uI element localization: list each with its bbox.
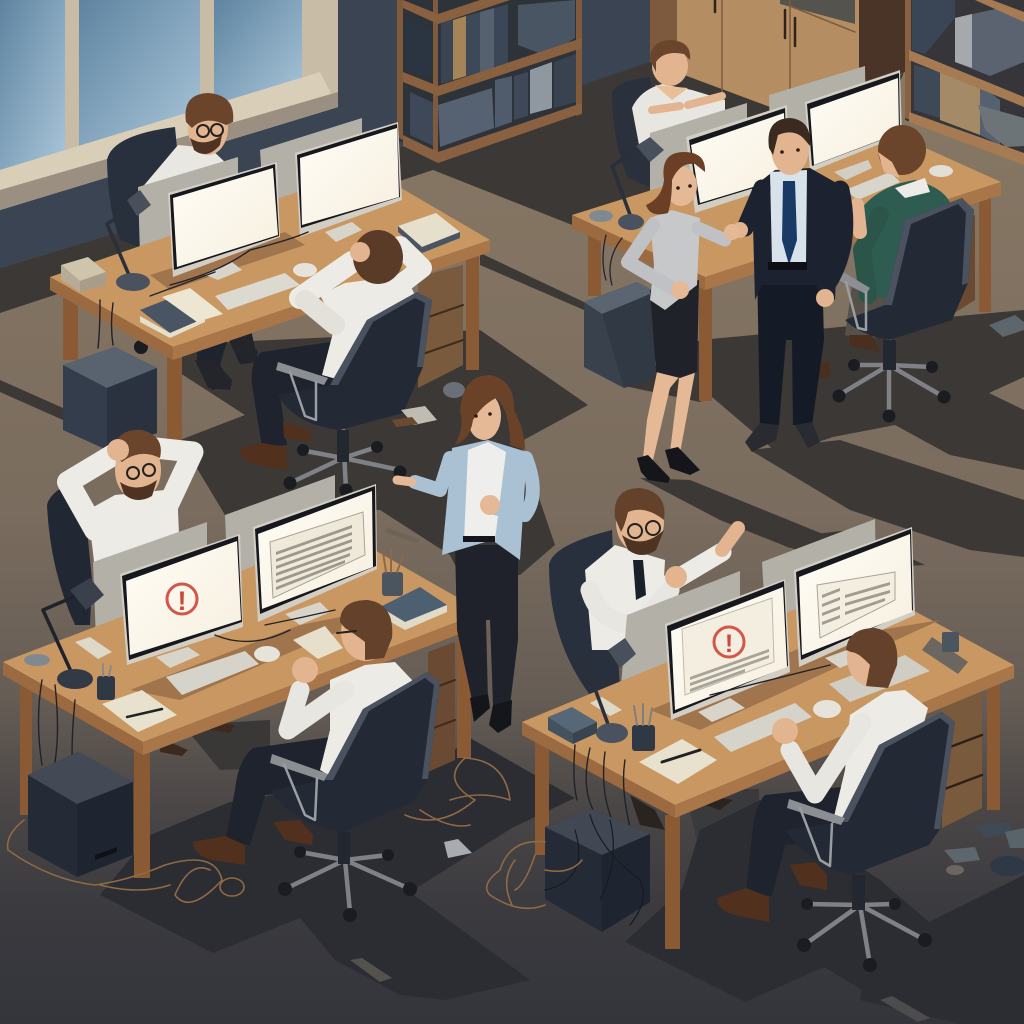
monitor: error alert: ! bbox=[178, 586, 186, 616]
monitor bbox=[295, 122, 402, 242]
monitor: error alert bbox=[120, 534, 243, 668]
chair back bbox=[785, 712, 955, 875]
shelf: back wall binders bbox=[397, 0, 582, 163]
desk lamp bbox=[612, 137, 664, 230]
workstation: top right bbox=[572, 40, 1001, 401]
computer tower bbox=[545, 809, 650, 932]
scattered papers bbox=[392, 315, 1024, 427]
cables bbox=[574, 665, 830, 835]
person: seated man front of bottom left desk bbox=[193, 600, 440, 922]
person: green sweater seated bbox=[814, 125, 974, 422]
workstation: bottom right bbox=[487, 488, 1014, 949]
chair back bbox=[278, 292, 432, 430]
monitor bbox=[686, 105, 789, 213]
floor cables bbox=[8, 758, 510, 902]
monitor bbox=[168, 162, 280, 280]
cables bbox=[603, 235, 622, 285]
stand pad bbox=[590, 697, 622, 716]
workstation: top left bbox=[50, 93, 490, 450]
coaster bbox=[589, 210, 613, 222]
item on floor bbox=[444, 839, 472, 858]
workstation: bottom left bbox=[3, 430, 510, 902]
tower cables bbox=[545, 815, 643, 925]
drawer unit bbox=[942, 692, 982, 828]
monitor bbox=[805, 70, 902, 180]
monitor: error alert bbox=[665, 579, 790, 722]
chair bbox=[832, 198, 974, 422]
pencil cup bbox=[97, 664, 115, 700]
desk top bbox=[3, 532, 483, 742]
keyboard bbox=[166, 651, 259, 695]
mouse bbox=[254, 646, 280, 662]
monitor: error alert: ! bbox=[725, 630, 733, 658]
scattered items bbox=[944, 822, 1024, 876]
stand pad bbox=[75, 637, 112, 659]
person: man with hands behind head bbox=[47, 430, 235, 756]
person: colleague at back bbox=[612, 40, 725, 187]
monitor shadow on desk bbox=[130, 605, 400, 700]
desk legs bbox=[588, 190, 991, 401]
desk legs bbox=[20, 625, 471, 878]
cables bbox=[38, 610, 335, 765]
person: woman in blue blouse bbox=[397, 375, 533, 733]
wall bbox=[0, 0, 650, 268]
mouse bbox=[929, 165, 953, 177]
keyboard bbox=[829, 655, 930, 702]
chair back bbox=[270, 672, 440, 832]
coaster bbox=[24, 654, 50, 666]
drawer unit bbox=[418, 265, 463, 388]
desk legs bbox=[535, 680, 1000, 949]
books bbox=[398, 213, 460, 253]
pencil cup bbox=[382, 548, 403, 596]
window bbox=[0, 0, 338, 210]
chair base bbox=[278, 832, 417, 922]
monitor: error log bbox=[794, 527, 915, 668]
box bbox=[61, 257, 106, 292]
monitor shadow on desk bbox=[650, 620, 940, 730]
drawer unit bbox=[940, 215, 975, 322]
monitor: document bbox=[253, 484, 377, 625]
monitor shadow on desk bbox=[150, 232, 305, 290]
desk top bbox=[522, 582, 1014, 805]
computer tower bbox=[28, 752, 133, 877]
back monitors bbox=[93, 522, 207, 640]
cables bbox=[98, 232, 308, 348]
keyboard bbox=[714, 703, 812, 752]
drawer unit bbox=[428, 642, 455, 772]
mouse bbox=[293, 263, 317, 277]
person: seated man front of bottom right desk bbox=[717, 628, 955, 972]
keyboard bbox=[215, 273, 300, 310]
desk lamp bbox=[584, 638, 636, 743]
person: woman in grey blouse bbox=[628, 152, 740, 483]
desk top bbox=[572, 122, 1001, 277]
books bbox=[380, 587, 447, 630]
phone bbox=[922, 632, 968, 674]
mouse bbox=[813, 700, 841, 718]
chair base bbox=[797, 875, 932, 972]
computer tower bbox=[584, 282, 655, 388]
desk lamp bbox=[43, 578, 104, 689]
shelf: right wall bbox=[905, 0, 1024, 165]
notepad bbox=[102, 690, 177, 732]
cabinet bbox=[650, 0, 905, 107]
paper bbox=[293, 626, 343, 659]
box bbox=[548, 707, 597, 744]
desk legs bbox=[63, 250, 479, 440]
back monitors bbox=[650, 103, 747, 192]
back monitors bbox=[138, 157, 238, 255]
desk top bbox=[50, 168, 490, 347]
person: man holding head bbox=[240, 230, 432, 496]
pencil cup bbox=[632, 704, 655, 751]
person: man at back with glasses bbox=[107, 93, 258, 390]
person: man in suit bbox=[732, 118, 844, 452]
back monitors bbox=[620, 571, 740, 697]
chair base bbox=[284, 430, 406, 496]
person: gesturing man with glasses bbox=[549, 488, 738, 830]
floor cables bbox=[487, 842, 582, 908]
desk lamp bbox=[107, 190, 151, 291]
notebook and books bbox=[140, 288, 223, 338]
notepad bbox=[639, 739, 717, 784]
keyboard bbox=[845, 172, 900, 200]
computer tower bbox=[63, 347, 157, 450]
